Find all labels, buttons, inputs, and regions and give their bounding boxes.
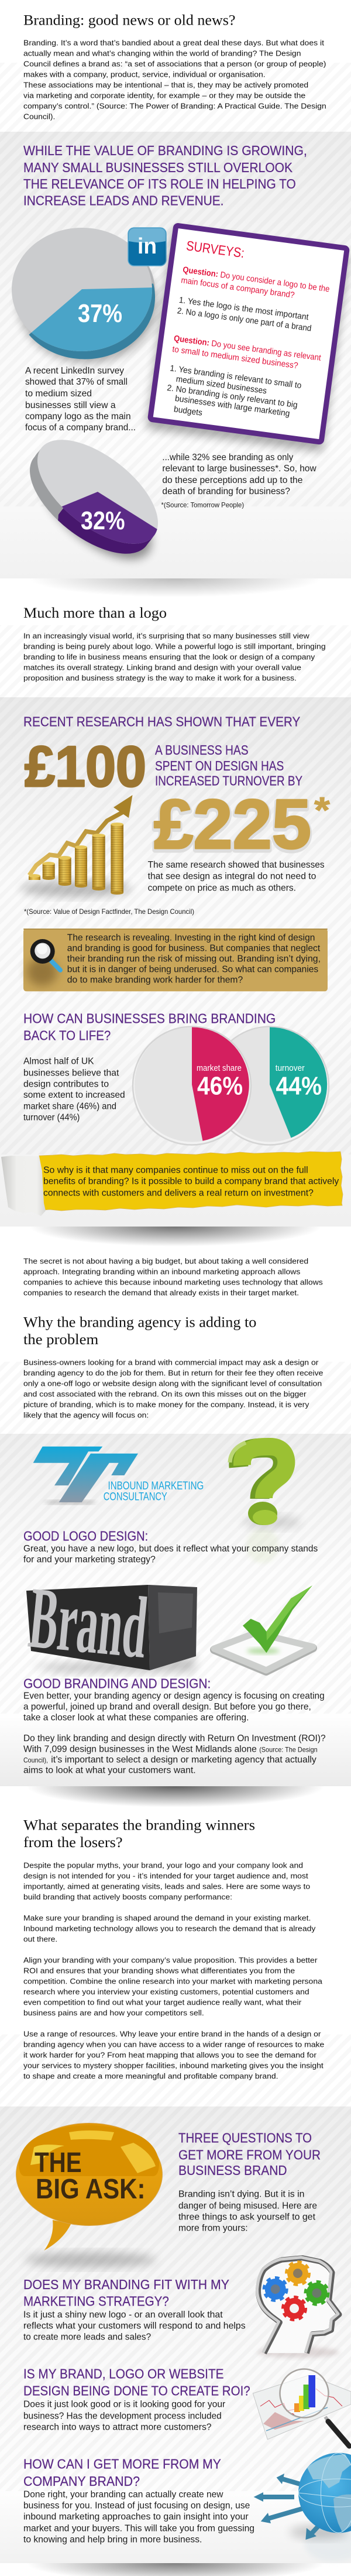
text block: 32% large businesses: *(Source: Tomorrow People) — [161, 501, 244, 509]
text block: done right — [23, 2490, 254, 2544]
text block: a business has: SPENT ON DESIGN HAS — [155, 758, 284, 773]
text block: intro definition: company’s control.” (Source: The Power of Branding: A Practical Guide. The Design — [23, 102, 326, 111]
text block: LinkedIn survey — [25, 366, 136, 433]
text block: the secret: approach. Integrating branding within an inbound marketing approach allows — [23, 1267, 301, 1276]
text block: 32% large businesses: do these perceptions add up to the — [162, 475, 302, 485]
text block: same research: that see design as integral do not need to — [148, 872, 316, 882]
stat: £225: £225 — [154, 785, 311, 864]
text block: business owners: only a one-off logo or website design along with the significant level of consultation — [23, 1379, 322, 1388]
image: brand letterpress block — [25, 1569, 197, 1677]
text block: range of resources: branding agency when you can have access to a wider range of resources to make — [23, 2040, 324, 2049]
panel: intro text — [0, 13, 351, 132]
text block: good logo design — [23, 1544, 318, 1564]
icon: globe with arrows — [254, 2453, 351, 2561]
icon: coin stacks with rising arrow — [20, 795, 132, 897]
icon: the big ask speech bubble — [16, 2123, 163, 2267]
text block: business owners: likely that the agency will focus on: — [23, 1411, 149, 1420]
text block: LinkedIn survey: A recent LinkedIn survey — [25, 366, 124, 376]
text block: torn paper question: connects with customers and delivers a real return on investment? — [43, 1188, 314, 1198]
text block: return on investment: Do they link branding and design directly with Return On Investment (ROI)? — [23, 1734, 326, 1743]
text block: intro definition — [23, 39, 326, 121]
heading: much more than a logo: Much more than a logo — [23, 605, 167, 621]
image: brand letterpress block: Brand — [25, 1569, 152, 1677]
panel: research section — [0, 697, 351, 1246]
heading: how can businesses: HOW CAN BUSINESSES BRING BRANDING — [23, 1011, 276, 1026]
heading: value of branding — [23, 143, 307, 208]
text block: first survey question: 2. No a logo is only one part of a brand — [177, 306, 312, 334]
text block: intro definition: makes with a company, product, service, individual or organisation. — [23, 70, 266, 79]
text block: visual world: branding is being purely about logo. While a powerful logo is still important, bringing — [23, 642, 326, 651]
text block: intro definition: These associations may be intentional – that is, they may be actively promoted — [23, 81, 308, 90]
text block: half of UK businesses: turnover (44%) — [23, 1112, 80, 1122]
panel: surveys section — [0, 132, 351, 597]
panel: much more than a logo — [0, 605, 351, 697]
text block: shiny new logo — [23, 2310, 246, 2342]
heading: what separates: from the losers? — [23, 1835, 123, 1851]
chart: 37% pie — [12, 228, 157, 363]
text block: return on investment: aims to look at what your customers want. — [23, 1765, 196, 1775]
text block: the secret — [23, 1256, 323, 1297]
text block: 32% large businesses — [161, 453, 316, 509]
text block: half of UK businesses: market share (46%) and — [23, 1101, 116, 1111]
text block: value proposition: competition. Combine the online research into your market with marketing persona — [23, 1977, 323, 1986]
text block: good branding and design — [23, 1691, 325, 1722]
icon: magnifier — [27, 939, 60, 986]
text block: look good — [23, 2400, 226, 2433]
heading: recent research: RECENT RESEARCH HAS SHOWN THAT EVERY — [23, 714, 300, 729]
text block: done right: market and your buyers. This will take you from guessing — [23, 2523, 254, 2533]
heading: is my brand — [23, 2366, 250, 2399]
icon: LinkedIn: in — [137, 234, 157, 259]
icon: the big ask speech bubble: BIG ASK: — [36, 2174, 145, 2205]
text block: half of UK businesses: Almost half of UK — [23, 1056, 94, 1066]
text block: done right: Done right, your branding can actually create new — [23, 2490, 223, 2500]
chart: 37% pie: 37% — [78, 299, 122, 328]
chart: market share 46% pie — [133, 1027, 251, 1145]
icon: green question mark — [230, 1443, 301, 1563]
text block: second survey question: Question: Do you see branding as relevant — [173, 334, 322, 363]
text block: business owners: Business-owners looking for a brand with commercial impact may ask a design or — [23, 1358, 319, 1367]
text block: value proposition: business pains are and how your competitors sell. — [23, 2009, 204, 2017]
text block: intro definition: Council). — [23, 112, 55, 121]
heading: three questions: BUSINESS BRAND — [178, 2163, 287, 2178]
text block: LinkedIn survey: showed that 37% of small — [25, 377, 128, 387]
text block: 32% large businesses: ...while 32% see branding as only — [162, 453, 293, 463]
text block: good branding and design: Even better, your branding agency or design agency is focusing on creating — [23, 1691, 325, 1701]
text block: range of resources: it work harder for you? From heat mapping that allows you to see the demand for — [23, 2051, 317, 2060]
text block: range of resources: your services to mystery shopper facilities, inbound marketing gives you the insight — [23, 2061, 324, 2070]
text block: business owners: picture of branding, which is to make money for the company. Instead, it is very — [23, 1400, 309, 1409]
panel: logo and brand section — [0, 1434, 351, 1807]
chart: turnover 44% pie: 44% — [276, 1071, 322, 1100]
panel: the big ask section — [0, 2106, 351, 2576]
text block: same research: The same research showed that businesses — [148, 860, 325, 870]
heading: how can I get more: HOW CAN I GET MORE FROM MY — [23, 2457, 221, 2472]
text block: the secret: companies to research the demand that already exists in their target market. — [23, 1288, 299, 1297]
text block: first survey question: main focus of a company brand? — [180, 276, 295, 300]
text block: second survey question: businesses with large marketing — [174, 394, 290, 419]
text block: second survey question: 2. No branding is only relevant to big — [166, 383, 298, 410]
text block: return on investment: With 7,099 design businesses in the West Midlands alone — [23, 1744, 257, 1754]
text block: look good: Does it just look good or is it looking good for your — [23, 2400, 226, 2410]
text block: popular myths: build branding that actively boosts company performance: — [23, 1893, 232, 1902]
text block: look good: business? Has the development process included — [23, 2411, 222, 2421]
heading: does my branding fit — [23, 2277, 229, 2308]
text block: shiny new logo: reflects what your customers will respond to and helps — [23, 2321, 246, 2331]
heading: what separates — [23, 1818, 255, 1851]
heading: three questions — [178, 2130, 321, 2178]
text block: a business has: A BUSINESS HAS — [155, 742, 249, 758]
heading: Branding good news or old news: Branding: good news or old news? — [23, 13, 235, 29]
heading: good branding and design: GOOD BRANDING AND DESIGN: — [23, 1676, 211, 1691]
stat: £225: * — [314, 790, 331, 831]
heading: surveys: SURVEYS: — [185, 238, 245, 261]
heading: value of branding: INCREASE LEADS AND REVENUE. — [23, 193, 223, 208]
text block: shiny new logo: to create more leads and sales? — [23, 2332, 151, 2342]
text block: branding isn't dying: danger of being misused. Here are — [178, 2201, 317, 2211]
text block: done right: to knowing and help bring in more business. — [23, 2534, 202, 2544]
icon: chart paper under magnifier — [253, 2369, 351, 2446]
text block: good branding and design: take a closer look at what these companies are offering. — [23, 1712, 249, 1722]
heading: three questions: THREE QUESTIONS TO — [178, 2130, 312, 2145]
text block: return on investment: Council), — [23, 1756, 48, 1764]
text block: value proposition — [23, 1956, 323, 2017]
text block: second survey question: medium sized businesses — [176, 375, 267, 396]
text block: popular myths: design is not intended for you - it’s intended for your target audience and, most — [23, 1872, 308, 1880]
text block: shaped around demand: Inbound marketing technology allows you to research the demand that is already — [23, 1924, 316, 1933]
text block: return on investment: it’s important to select a design or marketing agency that actually — [51, 1755, 316, 1765]
text block: look good: research into ways to attract more customers? — [23, 2423, 212, 2433]
callout: torn paper question — [1, 1152, 343, 1216]
logo: inbound marketing consultancy — [33, 1447, 204, 1504]
icon: the big ask speech bubble: THE — [35, 2147, 82, 2178]
text block: research callout: The research is revealing. Investing in the right kind of design — [67, 933, 315, 943]
text block: branding isn't dying — [178, 2189, 317, 2234]
text block: torn paper question: So why is it that many companies continue to miss out on the full — [43, 1165, 308, 1175]
stat: £100: £100 — [25, 734, 146, 799]
text block: same research: compete on price as much as others. — [148, 883, 296, 893]
text block: branding isn't dying: more from yours: — [178, 2224, 248, 2234]
text block: intro definition: Branding. It’s a word that’s bandied about a great deal these days. But what does it — [23, 39, 324, 47]
text block: 32% large businesses: death of branding for business? — [162, 487, 290, 496]
heading: does my branding fit: MARKETING STRATEGY? — [23, 2293, 169, 2308]
icon: green tick in checkbox — [214, 1585, 313, 1674]
text block: good branding and design: a powerful, joined up brand and overall design. But before you go there, — [23, 1702, 311, 1712]
text block: visual world: In an increasingly visual world, it’s surprising that so many businesses still view — [23, 632, 309, 640]
icon: paper curl — [1, 1156, 46, 1216]
text block: half of UK businesses: design contributes to — [23, 1080, 109, 1090]
text block: intro definition: actually mean and what’s changing within the world of branding? The Design — [23, 49, 301, 58]
text block: half of UK businesses: businesses believe that — [23, 1068, 119, 1078]
logo: inbound marketing consultancy: INBOUND MARKETING — [108, 1480, 204, 1492]
text block: shaped around demand — [23, 1914, 316, 1944]
text block: a business has: INCREASED TURNOVER BY — [155, 773, 302, 789]
heading: value of branding: WHILE THE VALUE OF BRANDING IS GROWING, — [23, 143, 307, 158]
chart: 32% pie: 32% — [81, 506, 125, 535]
heading: good logo design: GOOD LOGO DESIGN: — [23, 1529, 148, 1544]
text block: LinkedIn survey: to medium sized — [25, 389, 92, 399]
heading: how can businesses — [23, 1011, 276, 1043]
text block: range of resources: Use a range of resources. Why leave your entire brand in the hands of a design or — [23, 2030, 321, 2039]
heading: why the branding agency: Why the branding agency is adding to — [23, 1315, 256, 1331]
chart: market share 46% pie: market share — [197, 1063, 242, 1073]
text block: research callout: do to make branding work harder for them? — [67, 975, 243, 985]
chart: turnover 44% pie: turnover — [276, 1063, 305, 1073]
heading: how can businesses: BACK TO LIFE? — [23, 1028, 111, 1043]
text block: value proposition: research where you interview your existing customers, potential customers and — [23, 1988, 309, 1996]
text block: first survey question: 1. Yes the logo is the most important — [178, 296, 309, 322]
heading: what separates: What separates the branding winners — [23, 1818, 255, 1834]
chart: 32% pie — [30, 440, 158, 566]
heading: is my brand: DESIGN BEING DONE TO CREATE ROI? — [23, 2383, 250, 2399]
text block: a business has — [155, 742, 302, 789]
chart: turnover 44% pie — [211, 1027, 329, 1145]
text block: done right: business for you. Instead of just focusing on design, use — [23, 2500, 250, 2510]
text block: the secret: companies to achieve this because inbound marketing uses technology that allows — [23, 1277, 323, 1286]
text block: first survey question: Question: Do you consider a logo to be the — [182, 265, 330, 294]
text block: second survey question: to small to medium sized business? — [171, 345, 298, 371]
text block: visual world: branding to life in business means ensuring that the look or design of a company — [23, 653, 315, 662]
text block: 32% large businesses: relevant to large businesses*. So, how — [162, 464, 316, 474]
text block: return on investment — [23, 1734, 326, 1775]
callout: research is revealing — [23, 929, 328, 991]
text block: branding isn't dying: Branding isn’t dying. But it is in — [178, 2189, 304, 2199]
panel: winners and losers — [0, 1818, 351, 2106]
text block: intro definition: via marketing and corporate identity, for example – or they may be outside the — [23, 91, 305, 100]
heading: value of branding: THE RELEVANCE OF ITS ROLE IN HELPING TO — [23, 176, 296, 191]
text block: LinkedIn survey: company logo as the main — [25, 412, 131, 422]
text block: good logo design: Great, you have a new logo, but does it reflect what your company stands — [23, 1544, 318, 1554]
text block: branding isn't dying: three things to ask yourself to get — [178, 2212, 316, 2222]
heading: does my branding fit: DOES MY BRANDING FIT WITH MY — [23, 2277, 229, 2292]
text block: business owners: branding agency to do the job for them. But in return for their fee they often receive — [23, 1369, 323, 1378]
heading: is my brand: IS MY BRAND, LOGO OR WEBSITE — [23, 2366, 223, 2382]
text block: second survey question: budgets — [173, 405, 203, 418]
text block: LinkedIn survey: focus of a company brand... — [25, 423, 136, 433]
text block: visual world: proposition and business strategy is the way to make it work for a business. — [23, 674, 297, 683]
text block: return on investment: (Source: The Design — [259, 1745, 318, 1753]
heading: how can I get more — [23, 2457, 221, 2489]
text block: popular myths — [23, 1861, 310, 1902]
text block: torn paper question: benefits of branding? Is it possible to build a company brand that actively — [43, 1176, 339, 1186]
text block: same research — [148, 860, 325, 893]
text block: research callout: but it is in danger of being underused. So what can companies — [67, 965, 318, 975]
source note: design council: *(Source: Value of Design Factfinder, The Design Council) — [24, 907, 194, 916]
text block: value proposition: ROI and ensures that your branding shows what differentiates you from the — [23, 1967, 295, 1975]
text block: half of UK businesses: some extent to increased — [23, 1090, 125, 1100]
text block: range of resources — [23, 2030, 324, 2081]
text block: value proposition: even competition to find out what your target audience really want, what their — [23, 1998, 302, 2007]
stat: £225: £225 — [154, 787, 311, 865]
heading: how can I get more: COMPANY BRAND? — [23, 2474, 140, 2489]
text block: range of resources: to shape and create a more meaningful and profitable company brand. — [23, 2072, 278, 2081]
heading: value of branding: MANY SMALL BUSINESSES STILL OVERLOOK — [23, 160, 293, 175]
panel: surveys card — [146, 225, 350, 452]
text block: the secret: The secret is not about having a big budget, but about taking a well considered — [23, 1256, 308, 1265]
text block: half of UK businesses — [23, 1056, 125, 1122]
text block: done right: inbound marketing approaches to gain insight into your — [23, 2512, 249, 2522]
text block: shaped around demand: out there. — [23, 1935, 57, 1944]
icon: gears — [265, 2263, 328, 2319]
text block: intro definition: Council defines a brand as: “a set of associations that a person (or group of people) — [23, 60, 326, 68]
icon: head with gears — [257, 2258, 339, 2358]
text block: LinkedIn survey: businesses still view a — [25, 400, 116, 410]
text block: shiny new logo: Is it just a shiny new logo - or an overall look that — [23, 2310, 223, 2320]
text block: visual world: matches its overall strategy. Linking brand and design with your overall value — [23, 663, 301, 672]
text block: popular myths: Despite the popular myths, your brand, your logo and your company look and — [23, 1861, 303, 1870]
panel: branding agency problem — [0, 1256, 351, 1434]
icon: LinkedIn — [128, 228, 166, 266]
text block: research callout: and branding is good for business. But companies that neglect — [67, 944, 321, 954]
logo: inbound marketing consultancy: CONSULTANCY — [104, 1491, 167, 1503]
text block: research callout: their branding run the risk of missing out. Branding isn’t dying, — [67, 954, 321, 964]
text block: second survey question — [164, 334, 322, 433]
text block: business owners: and cost associated with the rebrand. On its own this misses out on the bigger — [23, 1390, 307, 1399]
heading: why the branding agency: the problem — [23, 1332, 99, 1348]
text block: visual world — [23, 632, 326, 683]
text block: torn paper question — [43, 1165, 339, 1198]
text block: shaped around demand: Make sure your branding is shaped around the demand in your existing market. — [23, 1914, 311, 1923]
text block: first survey question — [177, 265, 330, 335]
text block: second survey question: 1. Yes branding is relevant to small to — [170, 364, 302, 390]
text block: business owners — [23, 1358, 323, 1420]
text block: value proposition: Align your branding with your company’s value proposition. This provides a better — [23, 1956, 318, 1965]
text block: research callout — [67, 933, 321, 985]
heading: why the branding agency — [23, 1315, 256, 1348]
text block: popular myths: importantly, aimed at generating visits, leads and sales. Here are some ways to — [23, 1882, 310, 1891]
chart: market share 46% pie: 46% — [197, 1071, 243, 1100]
heading: three questions: GET MORE FROM YOUR — [178, 2147, 321, 2162]
text block: good logo design: for and your marketing strategy? — [23, 1554, 156, 1564]
